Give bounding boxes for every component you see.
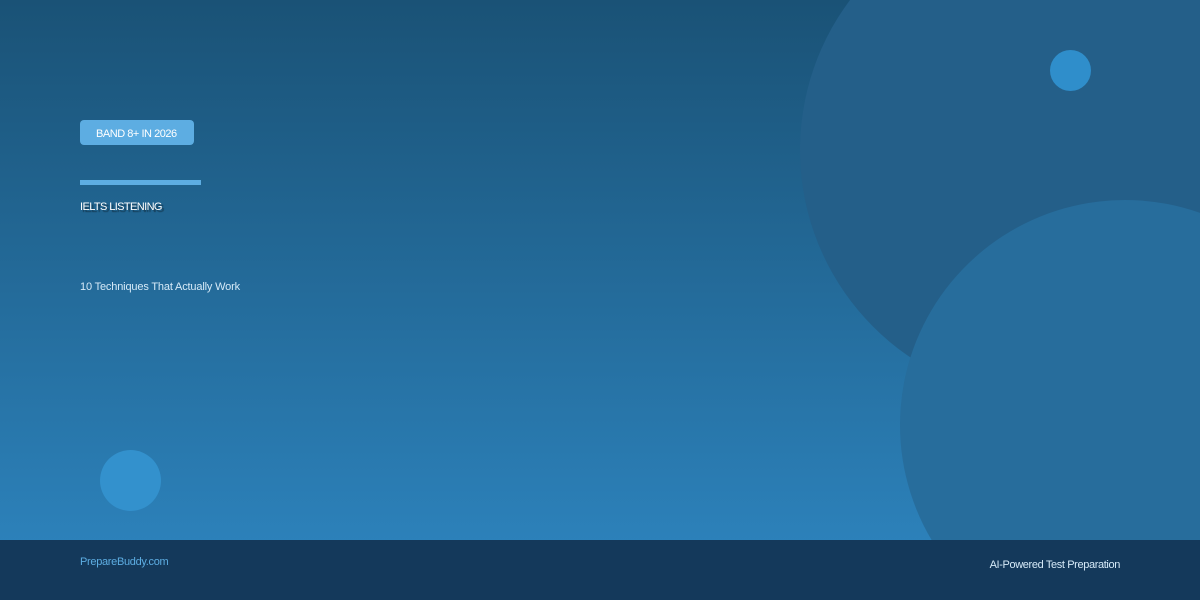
footer tagline: AI-Powered Test Preparation	[990, 559, 1120, 571]
title: IELTS LISTENING	[80, 201, 162, 213]
badge: band 8+ in 2026	[80, 120, 194, 145]
accent bar	[80, 180, 201, 185]
subtitle: 10 Techniques That Actually Work	[80, 281, 240, 293]
badge: band 8+ in 2026: BAND 8+ IN 2026	[96, 128, 177, 140]
footer brand: PrepareBuddy.com	[80, 556, 168, 568]
footer bar	[0, 540, 1200, 600]
